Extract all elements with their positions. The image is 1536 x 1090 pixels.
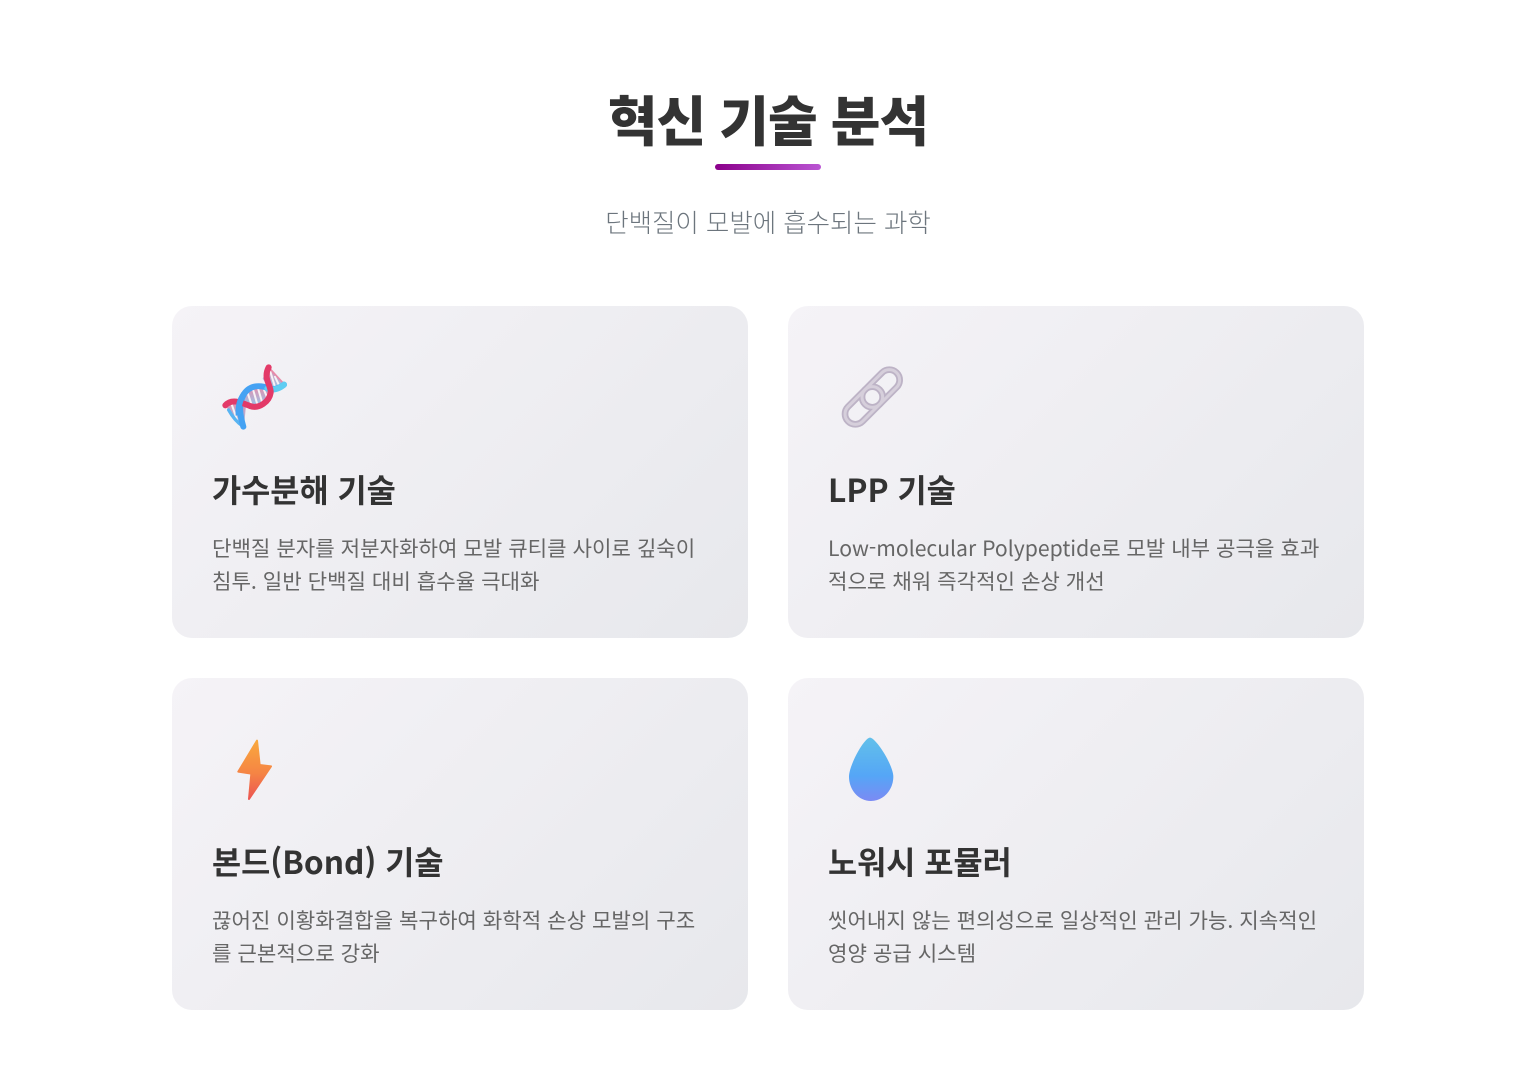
card description: Low-molecular Polypeptide로 모발 내부 공극을 효과 (828, 532, 1319, 563)
title: 혁신 기술 분석 (608, 78, 928, 157)
card description: 침투. 일반 단백질 대비 흡수율 극대화 (212, 565, 539, 596)
card title: 가수분해 기술 (212, 466, 396, 512)
panel: LPP 기술 (788, 306, 1364, 638)
panel: 가수분해 기술 (172, 306, 748, 638)
panel: 노워시 포뮬러 (788, 678, 1364, 1010)
title underline (715, 164, 821, 170)
card description (828, 904, 1317, 968)
card title: 본드(Bond) 기술 (212, 838, 444, 884)
icon: chain link (842, 366, 903, 428)
card description: 끊어진 이황화결합을 복구하여 화학적 손상 모발의 구조 (212, 904, 695, 935)
card title: 노워시 포뮬러 (828, 838, 1012, 884)
card description: 영양 공급 시스템 (828, 937, 976, 968)
header (605, 78, 931, 240)
card title: LPP 기술 (828, 466, 956, 512)
card description (212, 904, 695, 968)
subtitle: 단백질이 모발에 흡수되는 과학 (605, 203, 931, 240)
card description: 적으로 채워 즉각적인 손상 개선 (828, 565, 1105, 596)
card description (828, 532, 1319, 596)
card description: 를 근본적으로 강화 (212, 937, 380, 968)
panel: 본드(Bond) 기술 (172, 678, 748, 1010)
card description (212, 532, 695, 596)
icon: water drop (849, 738, 894, 801)
icon: DNA (222, 364, 287, 430)
card description: 씻어내지 않는 편의성으로 일상적인 관리 가능. 지속적인 (828, 904, 1317, 935)
card description: 단백질 분자를 저분자화하여 모발 큐티클 사이로 깊숙이 (212, 532, 695, 563)
icon: lightning bolt (237, 740, 272, 800)
